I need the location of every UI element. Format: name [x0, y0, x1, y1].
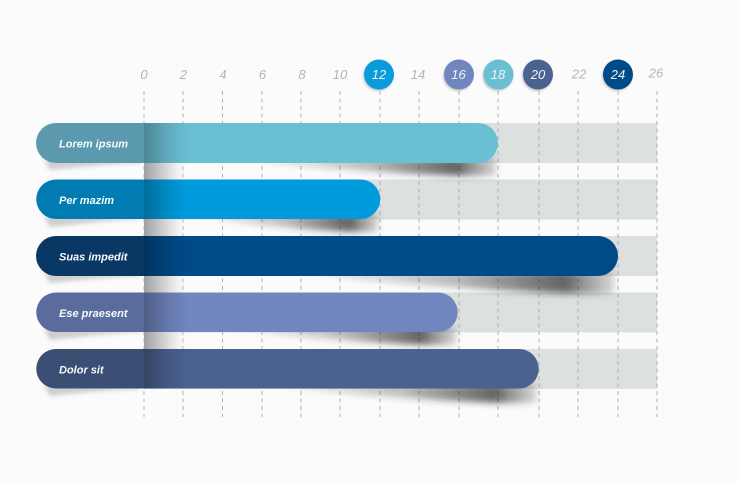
- axis labels: 2: [179, 67, 188, 82]
- background tracks: [144, 123, 657, 389]
- dashed grid lines: [144, 91, 657, 417]
- axis labels: 26: [648, 66, 664, 80]
- axis labels: 6: [259, 67, 267, 82]
- bar: Ese praesent: Ese praesent: [59, 308, 129, 320]
- marker circle: 16: [443, 60, 474, 91]
- axis labels: 0: [140, 67, 148, 82]
- marker circle: 18: [482, 60, 514, 91]
- marker circle: 24: [602, 60, 633, 91]
- marker circle: 18: 18: [491, 67, 506, 82]
- bar: Dolor sit: Dolor sit: [59, 364, 105, 376]
- bar: Per mazim: Per mazim: [59, 195, 114, 207]
- axis labels: 8: [298, 67, 306, 82]
- axis labels: [140, 66, 664, 82]
- marker circle: 16: 16: [451, 67, 466, 82]
- axis labels: 14: [411, 67, 425, 82]
- bar: Suas impedit: [36, 236, 618, 276]
- bar: Dolor sit: [36, 349, 539, 388]
- marker circle: 24: 24: [610, 67, 625, 82]
- bar: Suas impedit: Suas impedit: [59, 252, 129, 264]
- bar: Per mazim: [36, 180, 380, 219]
- marker circle: 20: 20: [530, 67, 546, 82]
- axis labels: 10: [333, 67, 348, 82]
- bar: Lorem ipsum: [36, 123, 498, 163]
- marker circle: 12: 12: [372, 67, 387, 82]
- marker circle: 12: [363, 60, 394, 91]
- bar shadows: [44, 158, 614, 403]
- marker circle: 20: [522, 60, 553, 91]
- shadow column beside labels: [144, 163, 188, 349]
- bar: Ese praesent: [36, 292, 458, 332]
- axis labels: 22: [571, 66, 587, 82]
- bar: Lorem ipsum: Lorem ipsum: [59, 138, 128, 150]
- axis labels: 4: [219, 67, 227, 82]
